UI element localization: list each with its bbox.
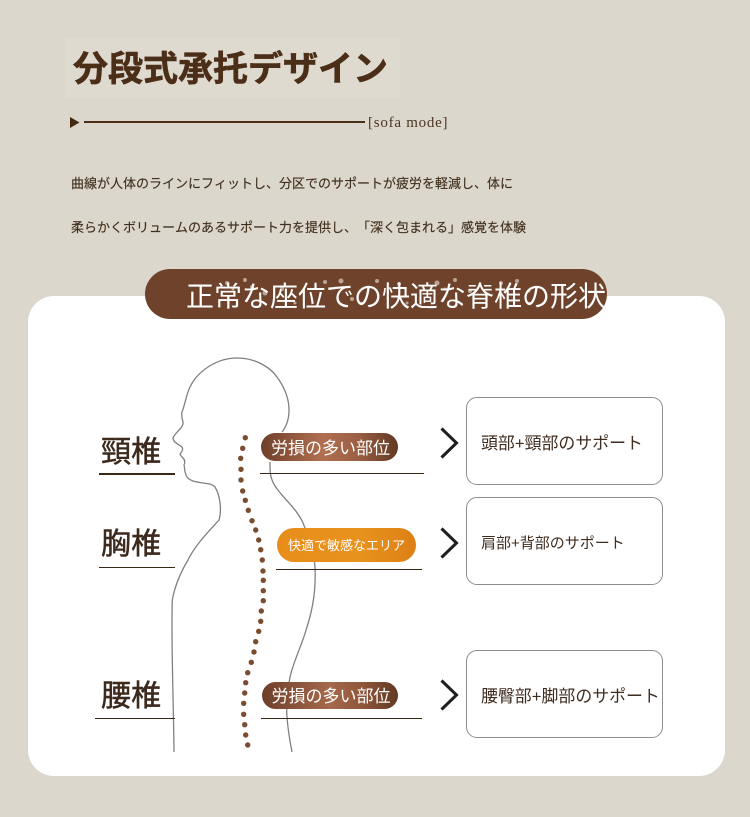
- subtitle rule with label: [70, 115, 448, 131]
- arrow: thoracic: [440, 527, 459, 559]
- box: head and neck support: [466, 397, 662, 484]
- box: waist, hip and leg support: 腰臀部+脚部のサポート: [481, 687, 660, 706]
- arrow: lumbar: [440, 679, 459, 711]
- pill texture specks: [225, 278, 530, 304]
- box: head and neck support: 頭部+頸部のサポート: [481, 434, 643, 453]
- box: shoulder and back support: 肩部+背部のサポート: [481, 535, 625, 552]
- panel: spine diagram card: [28, 296, 725, 776]
- description text: 柔らかくボリュームのあるサポート力を提供し、「深く包まれる」感覚を体験: [71, 220, 526, 235]
- badge: lumbar: [262, 682, 398, 709]
- icon: triangle marker: [70, 117, 80, 128]
- label: lumbar spine: 腰椎: [101, 680, 161, 713]
- illustration: human silhouette outline: [171, 357, 316, 752]
- arrow: cervical: [440, 427, 459, 459]
- description text: 曲線が人体のラインにフィットし、分区でのサポートが疲労を軽減し、体に: [71, 176, 513, 191]
- sofa mode label: [sofa mode]: [368, 115, 448, 131]
- label: thoracic spine: 胸椎: [101, 528, 161, 561]
- spine dots: [238, 435, 266, 748]
- divider line: [84, 120, 365, 122]
- badge: lumbar: 労損の多い部位: [272, 687, 390, 706]
- badge: cervical: 労損の多い部位: [271, 439, 390, 458]
- title: 分段式承托デザイン: [73, 50, 388, 89]
- description text: [71, 176, 526, 235]
- badge: thoracic: [277, 528, 416, 562]
- box: shoulder and back support: [466, 497, 662, 584]
- badge: thoracic: 快適で敏感なエリア: [288, 538, 405, 553]
- title: [65, 38, 400, 98]
- badge: cervical: [261, 433, 398, 461]
- heading pill: [145, 269, 607, 319]
- label: cervical spine: 頸椎: [101, 436, 161, 469]
- box: waist, hip and leg support: [466, 650, 662, 738]
- pill text: 正常な座位での快適な脊椎の形状: [186, 281, 606, 312]
